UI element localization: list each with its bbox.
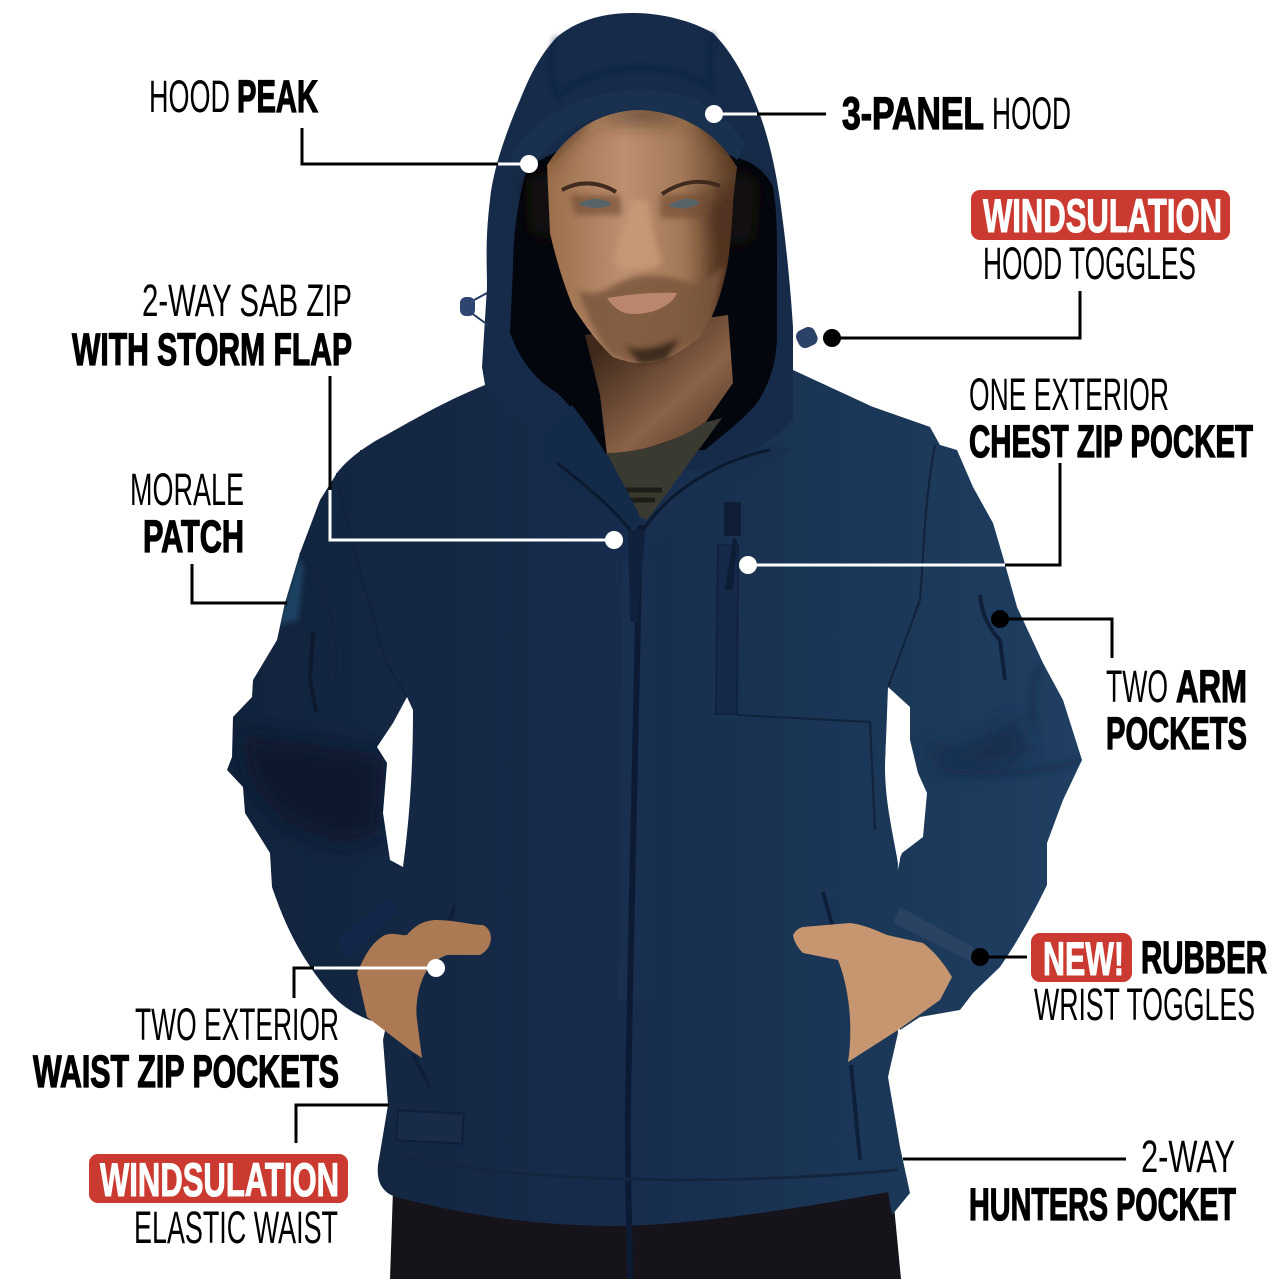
callout: windsulation elastic waist (89, 1105, 389, 1253)
face (547, 110, 737, 363)
waist pocket slits (413, 892, 860, 1160)
callout: two arm pockets (991, 610, 1247, 759)
hood peak brim (510, 90, 745, 165)
callout: two exterior waist zip pockets (33, 959, 445, 1097)
callout: 3-panel hood: 3-PANEL (842, 88, 984, 139)
right hand (793, 923, 952, 1062)
brim shadow (540, 108, 745, 170)
heading: HOOD (149, 71, 230, 122)
illustration: man wearing navy hooded fleece jacket (227, 13, 1082, 1279)
callout: two exterior waist zip pockets: WAIST ZIP POCKETS (33, 1046, 339, 1097)
toggle cords left (465, 293, 488, 325)
white gap left (377, 697, 413, 867)
sleeve and chest seams (300, 445, 935, 830)
trousers (390, 1185, 901, 1279)
main zip (628, 525, 640, 1279)
left sleeve shading (240, 553, 385, 845)
hood (482, 13, 793, 470)
wrist tab left (337, 897, 400, 957)
hood opening shadow (510, 108, 777, 455)
eye socket shadows (570, 192, 712, 218)
callout: windsulation elastic waist: ELASTIC WAIST (134, 1202, 338, 1253)
main zip placket (618, 560, 657, 1000)
callout: morale patch (130, 464, 287, 603)
jacket torso (360, 430, 935, 1226)
left collar (538, 405, 640, 530)
shoulders and yoke (360, 370, 930, 470)
callout: 2-way sab zip with storm flap: 2-WAY SAB ZIP (142, 275, 352, 326)
callout: two arm pockets: TWO (1106, 661, 1168, 712)
callout: 3-panel hood (705, 88, 1071, 139)
callout: one exterior chest zip pocket (739, 369, 1253, 574)
callout: morale patch: PATCH (143, 511, 244, 562)
callout: 2-way hunters pocket: 2-WAY (1141, 1131, 1235, 1182)
cuff fold line (1016, 668, 1081, 774)
nose (613, 200, 662, 270)
hood panel seams (551, 33, 713, 100)
callout: two arm pockets: ARM (1176, 661, 1247, 712)
right sleeve (800, 407, 1082, 1030)
callout: 2-way hunters pocket (903, 1131, 1236, 1230)
elbow fold shadow (940, 720, 1028, 768)
eyes (578, 199, 700, 208)
wrist tab right (893, 907, 973, 962)
face shading (540, 108, 745, 364)
hem seam (397, 1155, 898, 1180)
storm zip pull (628, 530, 645, 622)
right collar (647, 445, 790, 540)
callout: windsulation hood toggles (823, 189, 1230, 347)
callout: hood peak (149, 71, 538, 173)
callout: hood peak: PEAK (237, 71, 318, 122)
forearm fold shadow (240, 735, 385, 845)
patch highlight (278, 553, 303, 625)
callout: 3-panel hood: HOOD (992, 88, 1071, 139)
callout: morale patch: MORALE (130, 464, 244, 515)
t-shirt stripes (622, 490, 662, 500)
callout: two exterior waist zip pockets: TWO EXTERIOR (135, 999, 339, 1050)
beard (578, 265, 724, 364)
chin soul patch (625, 338, 680, 364)
left hand (357, 920, 491, 1058)
right cheek shadow (696, 176, 734, 320)
label tab on waist (396, 1110, 464, 1144)
chest zip pull (725, 538, 737, 590)
mouth (607, 293, 677, 314)
toggle bead left (460, 297, 475, 316)
temple hair shadow (532, 170, 754, 245)
neck (585, 315, 733, 455)
chest zip slider (724, 502, 741, 536)
white gap right (885, 687, 927, 863)
right sleeve shading (925, 665, 1080, 773)
t-shirt (607, 418, 722, 520)
arm pocket right (980, 595, 1005, 680)
callout: new rubber wrist toggles (971, 932, 1267, 1030)
callout: 2-way sab zip with storm flap (72, 275, 623, 549)
callout: windsulation elastic waist: WINDSULATION (100, 1153, 339, 1206)
arm pocket left (310, 632, 316, 712)
toggle bead right (794, 325, 820, 350)
callout: 2-way sab zip with storm flap: WITH STORM FLAP (72, 324, 352, 375)
chest pocket (716, 545, 738, 714)
collar zip lines (557, 450, 770, 530)
hood shell (482, 13, 793, 470)
eyebrows (562, 182, 720, 194)
callout: new rubber wrist toggles: NEW! (1043, 932, 1124, 985)
left sleeve (227, 440, 460, 1023)
